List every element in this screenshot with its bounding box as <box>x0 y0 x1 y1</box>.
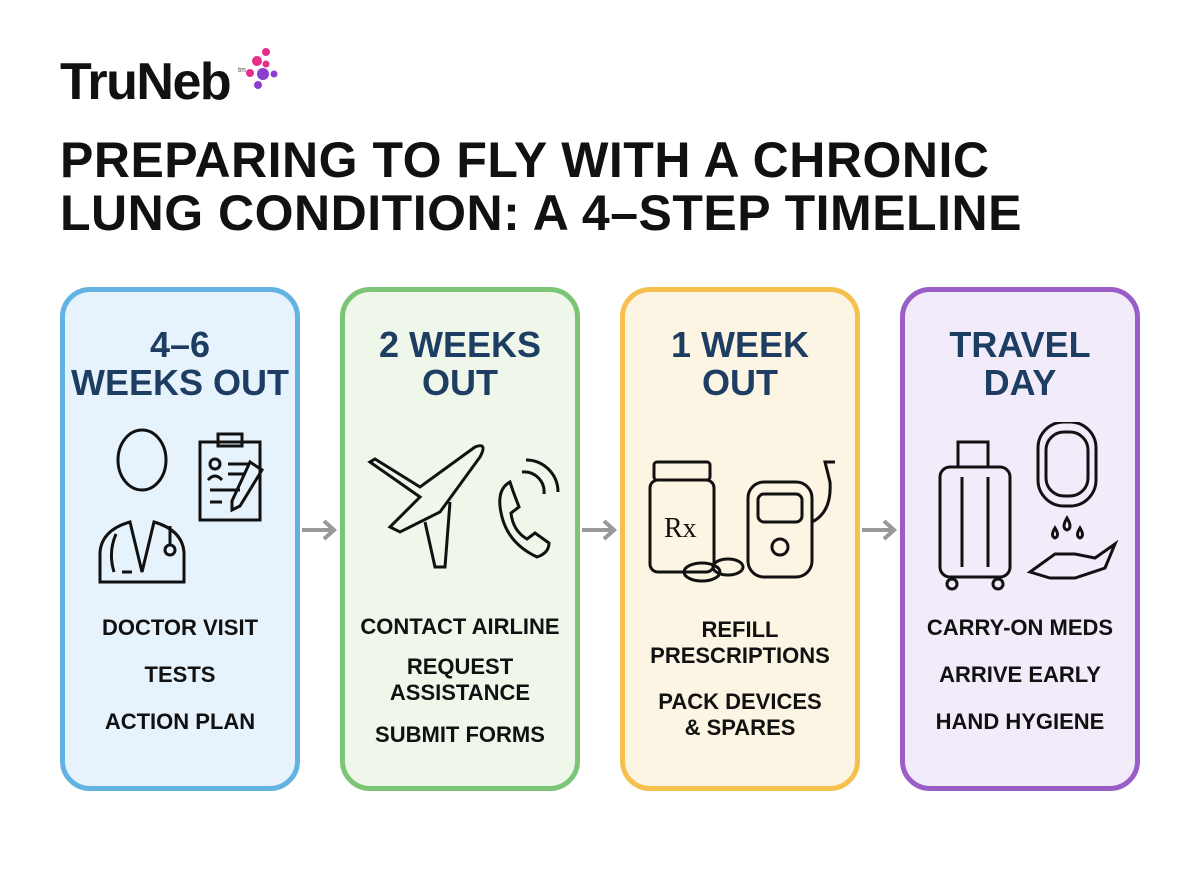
items <box>650 617 830 740</box>
icon: plane and phone <box>367 444 560 568</box>
items: CARRY-ON MEDS <box>927 615 1113 640</box>
heading: DAY <box>984 362 1056 403</box>
items: DOCTOR VISIT <box>102 615 258 640</box>
items: & SPARES <box>685 715 795 740</box>
title <box>60 132 1022 241</box>
panel: 1 week out <box>620 287 860 791</box>
icon: pills and nebulizer: Rx <box>664 513 697 544</box>
items: ASSISTANCE <box>390 680 530 705</box>
items: ARRIVE EARLY <box>939 662 1101 687</box>
items: ACTION PLAN <box>105 709 255 734</box>
heading: 4–6 <box>150 324 210 365</box>
panel: travel day <box>900 287 1140 791</box>
logo dots <box>238 48 278 89</box>
panel: 2 weeks out <box>340 287 580 791</box>
items: TESTS <box>145 662 215 687</box>
heading: 2 WEEKS <box>379 324 541 365</box>
heading <box>379 324 541 403</box>
items: PRESCRIPTIONS <box>650 643 830 668</box>
heading: 1 WEEK <box>671 324 809 365</box>
heading: WEEKS OUT <box>71 362 289 403</box>
items: CONTACT AIRLINE <box>360 614 560 639</box>
items: HAND HYGIENE <box>936 709 1104 734</box>
arrow <box>302 520 337 540</box>
heading <box>949 324 1091 403</box>
heading: TRAVEL <box>949 324 1091 365</box>
icon: suitcase, window, hand <box>938 422 1118 590</box>
arrow <box>862 520 897 540</box>
items <box>102 615 258 734</box>
items <box>360 614 560 747</box>
heading <box>671 324 809 403</box>
icon: pills and nebulizer <box>648 460 835 582</box>
items <box>927 615 1113 734</box>
items: REQUEST <box>407 654 513 679</box>
logo: TruNeb <box>60 53 230 111</box>
heading <box>71 324 289 403</box>
logo dots: tm <box>238 67 246 74</box>
title: LUNG CONDITION: A 4–STEP TIMELINE <box>60 185 1022 241</box>
arrow <box>582 520 617 540</box>
items: PACK DEVICES <box>658 689 822 714</box>
heading: OUT <box>702 362 778 403</box>
heading: OUT <box>422 362 498 403</box>
items: REFILL <box>702 617 778 642</box>
panel: 4-6 weeks out <box>60 287 300 791</box>
icon: doctor and clipboard <box>98 428 264 584</box>
items: SUBMIT FORMS <box>375 722 545 747</box>
title: PREPARING TO FLY WITH A CHRONIC <box>60 132 989 188</box>
